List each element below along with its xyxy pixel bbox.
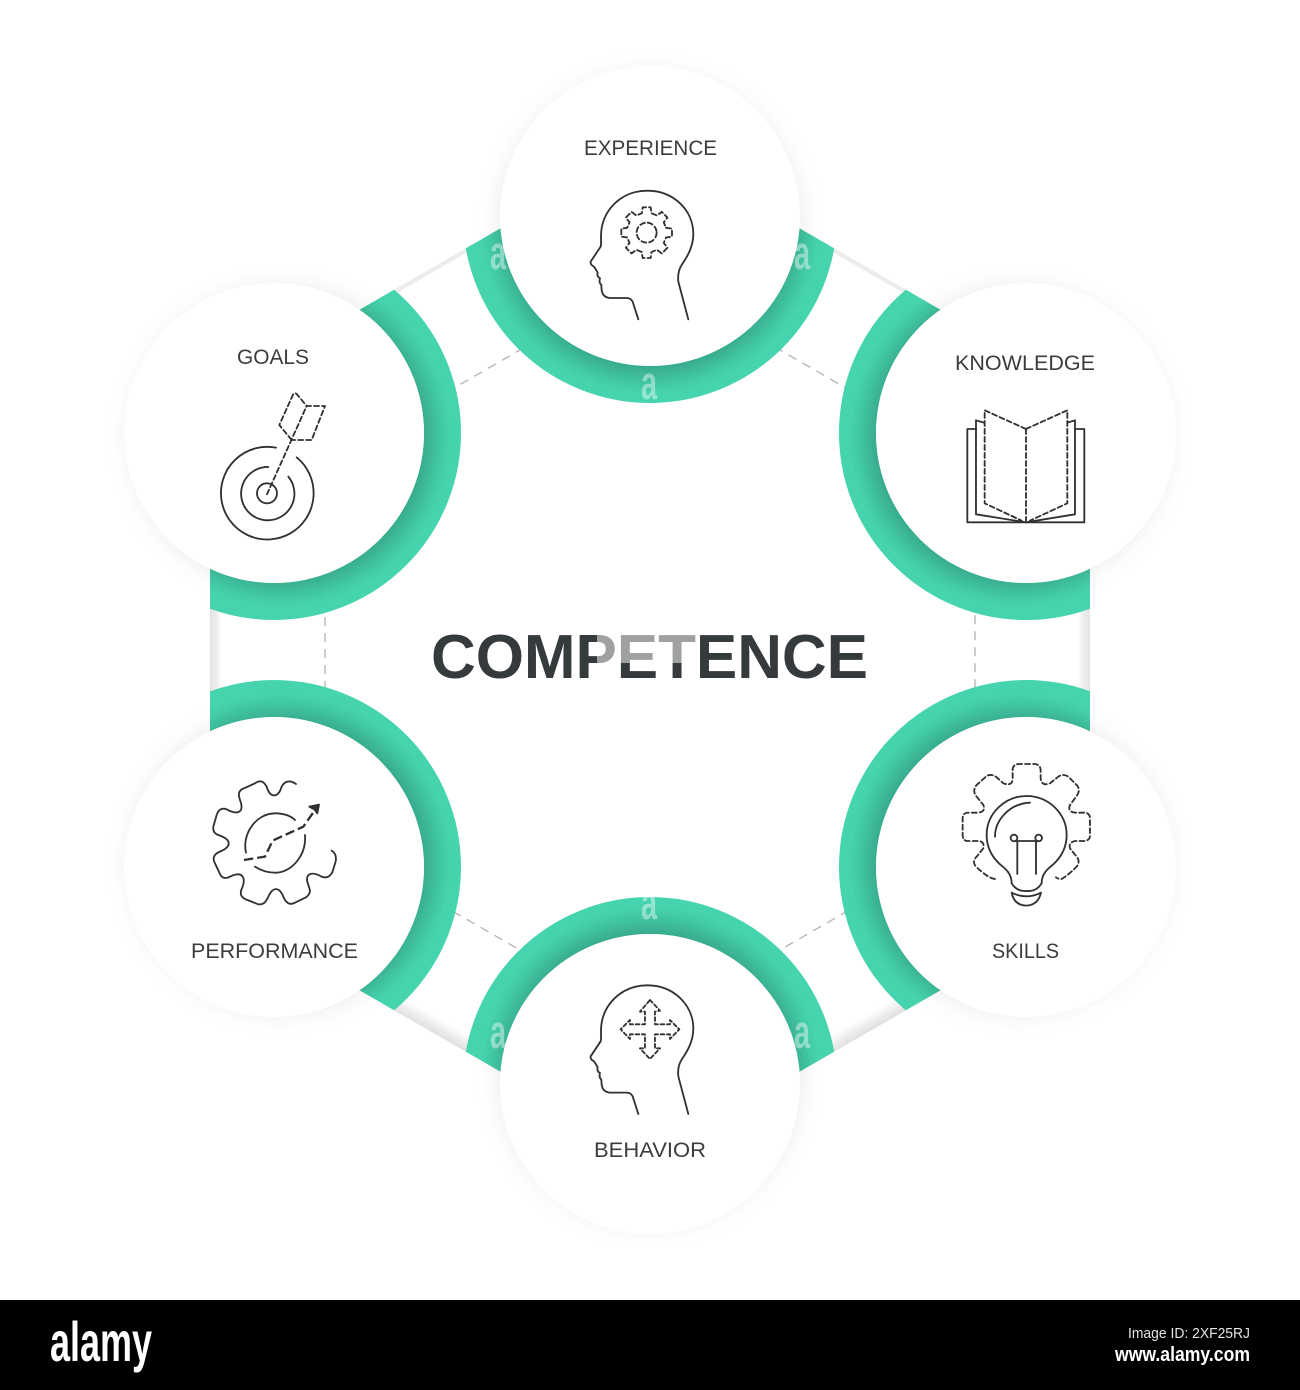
label: knowledge: KNOWLEDGE [955, 352, 1095, 375]
circle shadow: experience [500, 74, 800, 374]
watermark marks: behavior ring: a [794, 1006, 811, 1059]
watermark marks: behavior ring: a [490, 1006, 507, 1059]
ring: skills [839, 680, 1090, 1010]
label: experience: EXPERIENCE [584, 137, 717, 160]
panel: experience [466, 140, 834, 403]
image id: Image ID: 2XF25RJ [1128, 1325, 1250, 1342]
circle: experience [500, 66, 800, 366]
circle: performance [124, 717, 424, 1017]
icon: head with gear [591, 191, 693, 319]
icon: head with arrows [591, 985, 693, 1114]
footer bar [0, 1300, 1300, 1390]
website: www.alamy.com [1114, 1344, 1250, 1366]
inner dashed hexagon [325, 275, 975, 1025]
watermark marks: behavior ring [490, 877, 811, 1059]
watermark marks: experience ring [490, 227, 811, 410]
circle: knowledge [876, 283, 1176, 583]
outer hexagon connector band [210, 142, 1090, 1158]
label: skills: SKILLS [992, 940, 1059, 963]
icon: open book [967, 410, 1084, 522]
icon: gear with rising arrow [213, 781, 336, 904]
label: goals: GOALS [237, 346, 309, 369]
ring: behavior [466, 897, 834, 1072]
footer logo: alamy [50, 1310, 152, 1373]
circle shadow: goals [131, 287, 431, 587]
watermark marks: experience ring: a [794, 227, 811, 280]
circle shadow: skills [869, 713, 1169, 1013]
panel: goals [158, 284, 461, 620]
watermark over title [597, 633, 696, 663]
watermark marks: behavior ring: a [641, 877, 658, 930]
title: COMPETENCE [431, 623, 868, 692]
watermark marks: experience ring: a [490, 227, 507, 280]
panel: skills [839, 680, 1142, 1016]
icon: dart and target [221, 393, 325, 539]
label: behavior: BEHAVIOR [594, 1139, 706, 1162]
circle shadow: knowledge [869, 287, 1169, 587]
panel: performance [158, 680, 461, 1016]
circle shadow: performance [131, 713, 431, 1013]
label: performance: PERFORMANCE [191, 940, 358, 963]
watermark marks: experience ring: a [641, 357, 658, 410]
circle: skills [876, 717, 1176, 1017]
panel: knowledge [839, 284, 1142, 620]
circle shadow: behavior [500, 926, 800, 1226]
icon: light bulb in gear [963, 764, 1090, 906]
ring: experience [466, 228, 834, 403]
panel: behavior [466, 897, 834, 1158]
circle: behavior [500, 934, 800, 1234]
ring: knowledge [839, 290, 1090, 620]
circle: goals [124, 283, 424, 583]
ring: performance [210, 680, 461, 1010]
ring: goals [210, 290, 461, 620]
